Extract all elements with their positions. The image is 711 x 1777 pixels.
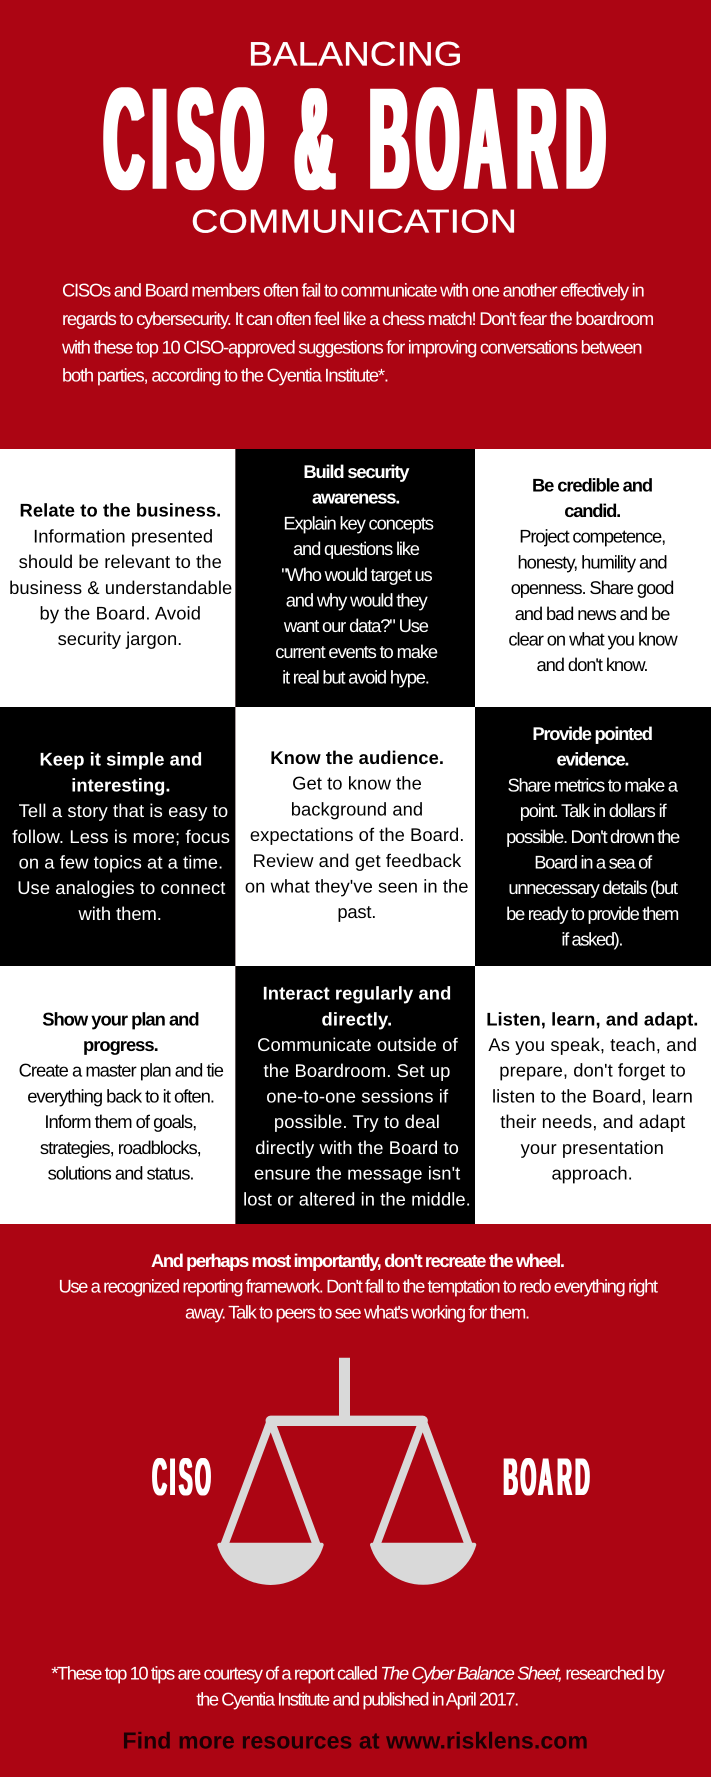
title: CISO and Board: CISO & BOARD bbox=[104, 58, 605, 219]
panel: provide pointed evidence: evidence. bbox=[556, 749, 630, 770]
panel: listen, learn, and adapt: your presentation bbox=[521, 1137, 664, 1158]
panel: header bbox=[61, 36, 654, 386]
panel: build security awareness: and questions like bbox=[293, 538, 420, 559]
text block: don't recreate the wheel bbox=[58, 1250, 658, 1322]
intro text block bbox=[61, 280, 654, 386]
panel: keep it simple and interesting: interesting. bbox=[71, 774, 170, 795]
panel: relate to the business bbox=[0, 449, 235, 707]
intro text block: regards to cybersecurity. It can often feel like a chess match! Don't fear the boardroom bbox=[62, 308, 654, 329]
text block: don't recreate the wheel: Use a recognized reporting framework. Don't fall to the temptation to redo everything right bbox=[58, 1276, 658, 1297]
panel: build security awareness bbox=[235, 449, 475, 707]
intro text block: CISOs and Board members often fail to communicate with one another effectively in bbox=[62, 280, 645, 301]
title: communication: COMMUNICATION bbox=[191, 202, 517, 240]
call to action: more resources: Find more resources at www.risklens.com bbox=[122, 1727, 588, 1753]
panel: build security awareness: Build security bbox=[303, 461, 410, 482]
panel: be credible and candid: Be credible and bbox=[532, 474, 653, 495]
panel: interact regularly and directly: one-to-one sessions if bbox=[266, 1086, 449, 1106]
panel: be credible and candid: candid. bbox=[564, 500, 621, 521]
panel: relate to the business: security jargon. bbox=[58, 628, 182, 649]
panel: know the audience: past. bbox=[337, 901, 376, 922]
footnote bbox=[51, 1662, 666, 1709]
panel: show your plan and progress: Create a master plan and tie bbox=[19, 1060, 224, 1081]
panel: build security awareness: "Who would target us bbox=[281, 564, 433, 585]
panel: listen, learn, and adapt: approach. bbox=[552, 1162, 633, 1184]
panel: build security awareness: and why would they bbox=[286, 590, 428, 610]
intro text block: both parties, according to the Cyentia Institute*. bbox=[62, 365, 389, 386]
panel: know the audience: Get to know the bbox=[292, 773, 422, 794]
panel: be credible and candid: and bad news and be bbox=[515, 603, 670, 624]
panel: interact regularly and directly: directly with the Board to bbox=[255, 1137, 459, 1158]
title: balancing: BALANCING bbox=[248, 36, 463, 74]
panel: know the audience bbox=[235, 707, 475, 966]
panel: keep it simple and interesting: Use analogies to connect bbox=[17, 877, 225, 898]
panel: provide pointed evidence: point. Talk in dollars if bbox=[520, 800, 667, 821]
panel: relate to the business: Relate to the business. bbox=[20, 500, 221, 521]
footnote: the Cyentia Institute and published in April 2017. bbox=[196, 1688, 519, 1709]
panel: listen, learn, and adapt bbox=[475, 966, 711, 1224]
panel: listen, learn, and adapt: prepare, don't forget to bbox=[499, 1060, 686, 1081]
panel: build security awareness: current events to make bbox=[275, 641, 438, 662]
panel: listen, learn, and adapt: listen to the Board, learn bbox=[492, 1085, 693, 1106]
panel: show your plan and progress bbox=[0, 966, 235, 1224]
panel: show your plan and progress: progress. bbox=[83, 1034, 159, 1055]
panel: show your plan and progress: Show your plan and bbox=[42, 1008, 200, 1029]
footnote: *These top 10 tips are courtesy of a report called The Cyber Balance Sheet, researched by bbox=[51, 1662, 666, 1683]
panel: interact regularly and directly: directly. bbox=[322, 1008, 392, 1029]
panel: interact regularly and directly: the Boardroom. Set up bbox=[264, 1060, 450, 1081]
panel: provide pointed evidence bbox=[475, 707, 711, 966]
panel: interact regularly and directly: Communicate outside of bbox=[257, 1034, 458, 1055]
panel: provide pointed evidence: possible. Don't drown the bbox=[506, 826, 680, 847]
panel: provide pointed evidence: Provide pointed bbox=[532, 723, 653, 744]
panel: keep it simple and interesting: with them. bbox=[78, 903, 162, 924]
label: CISO: CISO bbox=[152, 1448, 211, 1507]
panel: provide pointed evidence: unnecessary details (but bbox=[508, 877, 678, 898]
panel: provide pointed evidence: Board in a sea of bbox=[534, 852, 653, 872]
panel: show your plan and progress: everything back to it often. bbox=[27, 1085, 215, 1106]
panel: keep it simple and interesting: on a few topics at a time. bbox=[19, 852, 223, 872]
panel: be credible and candid: openness. Share good bbox=[511, 577, 674, 598]
panel: provide pointed evidence: be ready to provide them bbox=[506, 903, 679, 924]
panel: interact regularly and directly bbox=[235, 966, 475, 1224]
panel: interact regularly and directly: lost or altered in the middle. bbox=[243, 1188, 471, 1209]
panel: provide pointed evidence: Share metrics to make a bbox=[508, 774, 679, 795]
text block: don't recreate the wheel: And perhaps most importantly, don't recreate the wheel. bbox=[151, 1250, 565, 1271]
label: BOARD: BOARD bbox=[503, 1448, 590, 1507]
intro text block: with these top 10 CISO-approved suggestions for improving conversations between bbox=[61, 336, 643, 357]
panel: listen, learn, and adapt: Listen, learn, and adapt. bbox=[486, 1008, 698, 1029]
panel: be credible and candid: Project competence, bbox=[519, 526, 666, 547]
panel: build security awareness: want our data?" Use bbox=[283, 615, 429, 636]
icon: balance scale bbox=[217, 1358, 476, 1585]
panel: show your plan and progress: Inform them of goals, bbox=[44, 1111, 197, 1132]
panel: build security awareness: it real but avoid hype. bbox=[282, 667, 430, 688]
panel: know the audience: on what they've seen in the bbox=[245, 876, 468, 896]
panel: relate to the business: by the Board. Avoid bbox=[40, 602, 201, 624]
panel: be credible and candid: clear on what you know bbox=[508, 628, 678, 650]
panel: relate to the business: business & understandable bbox=[9, 577, 232, 598]
panel: show your plan and progress: strategies, roadblocks, bbox=[40, 1137, 202, 1158]
panel: interact regularly and directly: ensure the message isn't bbox=[254, 1163, 460, 1184]
panel: relate to the business: Information presented bbox=[33, 525, 213, 546]
panel: interact regularly and directly: possible. Try to deal bbox=[274, 1111, 440, 1132]
panel: know the audience: Review and get feedback bbox=[253, 850, 462, 871]
panel: be credible and candid bbox=[475, 449, 711, 707]
panel: keep it simple and interesting: Keep it simple and bbox=[40, 749, 202, 770]
panel: know the audience: Know the audience. bbox=[270, 747, 444, 768]
panel: provide pointed evidence: if asked). bbox=[561, 929, 624, 950]
panel: build security awareness: awareness. bbox=[312, 487, 400, 508]
panel: listen, learn, and adapt: their needs, and adapt bbox=[500, 1111, 685, 1132]
text block: don't recreate the wheel: away. Talk to peers to see what's working for them. bbox=[185, 1301, 530, 1322]
panel: know the audience: expectations of the Board. bbox=[250, 824, 464, 845]
panel: keep it simple and interesting: Tell a story that is easy to bbox=[19, 800, 228, 821]
panel: build security awareness: Explain key concepts bbox=[283, 512, 434, 533]
panel: relate to the business: should be relevant to the bbox=[19, 551, 222, 572]
panel: be credible and candid: honesty, humility and bbox=[518, 551, 668, 572]
panel: know the audience: background and bbox=[291, 798, 423, 819]
panel: be credible and candid: and don't know. bbox=[536, 654, 648, 675]
panel: keep it simple and interesting bbox=[0, 707, 235, 966]
panel: interact regularly and directly: Interact regularly and bbox=[263, 983, 451, 1004]
panel: keep it simple and interesting: follow. Less is more; focus bbox=[12, 826, 230, 847]
panel: show your plan and progress: solutions and status. bbox=[48, 1162, 194, 1184]
panel: listen, learn, and adapt: As you speak, teach, and bbox=[488, 1034, 697, 1055]
